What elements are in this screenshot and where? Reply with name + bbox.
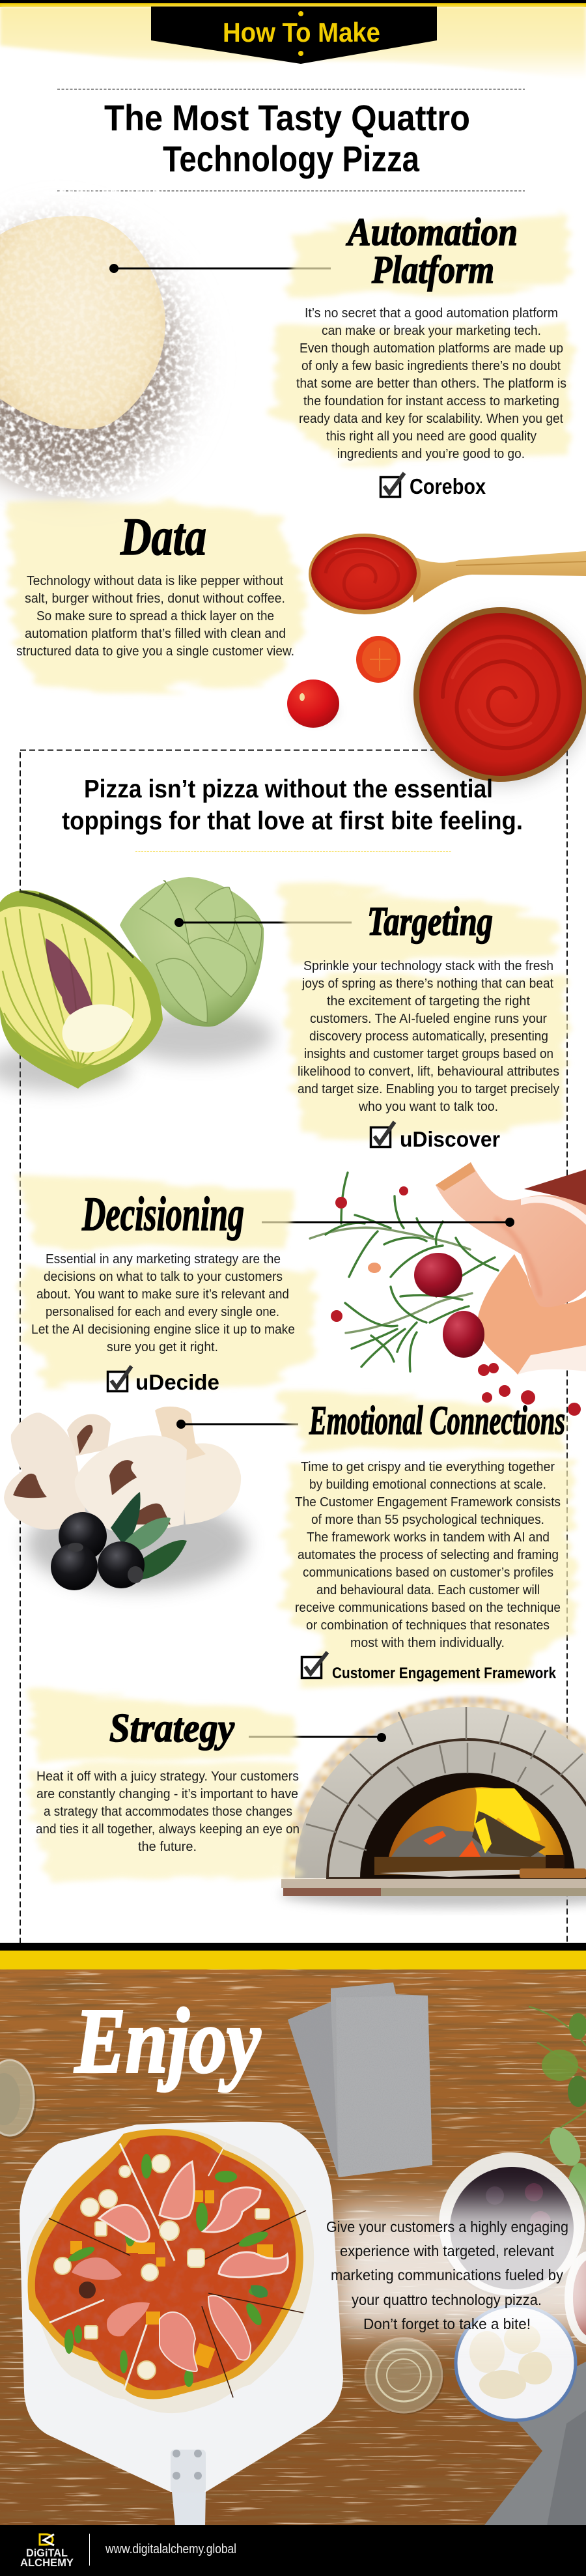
pointer line: automation platform — [109, 264, 331, 273]
body text: joys of spring as there’s nothing that can beat — [301, 977, 553, 991]
subheading: toppings statement: toppings for that love at first bite feeling. — [62, 807, 523, 835]
sliced whites — [54, 2154, 270, 2379]
product tag: Corebox — [380, 473, 486, 498]
crust — [27, 2129, 314, 2413]
body text: automation platform that’s filled with clean and — [25, 627, 286, 641]
icon: cherry tomato half — [356, 636, 400, 683]
body text: decisions on what to talk to your customers — [44, 1270, 283, 1284]
counter — [281, 1879, 586, 1888]
cranberries — [414, 1253, 462, 1297]
body text: most with them individually. — [350, 1636, 505, 1650]
body text: this right all you need are good quality — [326, 429, 537, 444]
body text: the excitement of targeting the right — [327, 994, 530, 1009]
body text: ready data and key for scalability. When you get — [299, 412, 563, 426]
body text: So make sure to spread a thick layer on the — [36, 609, 274, 623]
sauce — [28, 2129, 303, 2399]
body text: automates the process of selecting and framing — [298, 1548, 559, 1562]
body text: Sprinkle your technology stack with the fresh — [303, 959, 553, 973]
pizza peel — [20, 2122, 343, 2526]
body text: a strategy that accommodates those changes — [44, 1805, 292, 1819]
product tag: uDecide: uDecide — [135, 1370, 219, 1394]
banner: How To Make: How To Make — [223, 17, 380, 48]
body text — [36, 1769, 300, 1854]
panel: decisioning — [14, 1175, 313, 1394]
heading: Automation Platform: Automation — [345, 210, 518, 253]
body text: communications based on customer’s profiles — [303, 1566, 553, 1580]
closing text — [326, 2218, 568, 2332]
herbs — [529, 2007, 586, 2215]
body text: Essential in any marketing strategy are the — [46, 1252, 281, 1267]
divider — [89, 2534, 90, 2566]
website: www.digitalalchemy.global — [105, 2542, 236, 2556]
pointer line: emotional connections — [176, 1420, 298, 1429]
body text: receive communications based on the technique — [295, 1601, 561, 1615]
bowl of cherries — [439, 2153, 586, 2298]
body text — [298, 959, 559, 1114]
body text: structured data to give you a single customer view. — [16, 644, 294, 659]
image: stone pizza oven — [280, 1696, 586, 1908]
body text: Time to get crispy and tie everything together — [301, 1460, 555, 1474]
heading: Automation Platform: Platform — [371, 248, 494, 291]
body text: about. You want to make sure it’s relevant and — [36, 1287, 289, 1302]
body text — [295, 1460, 561, 1650]
glass on table — [365, 2338, 444, 2414]
body text: personalised for each and every single one. — [46, 1305, 279, 1319]
body text: customers. The AI-fueled engine runs your — [310, 1012, 547, 1026]
body text: Heat it off with a juicy strategy. Your customers — [36, 1769, 299, 1784]
product tag: uDiscover — [371, 1122, 500, 1151]
body text: The Customer Engagement Framework consists — [295, 1495, 561, 1510]
body text: of more than 55 psychological techniques. — [311, 1513, 544, 1527]
body text: Even though automation platforms are made up — [300, 341, 563, 356]
body text: that some are better than others. The platform is — [296, 377, 566, 391]
white glow behind text — [332, 2205, 586, 2332]
bowl at right edge — [565, 2251, 586, 2345]
title block — [57, 89, 525, 191]
image: dough on floured wood — [0, 173, 247, 498]
bowl of rolled starters — [456, 2306, 576, 2420]
top stripes — [0, 0, 586, 7]
body text: insights and customer target groups based on — [304, 1047, 553, 1061]
subheading: toppings statement: Pizza isn’t pizza without the essential — [84, 775, 493, 803]
body text: or combination of techniques that resonates — [306, 1618, 550, 1633]
image: rosemary, cranberries and ham — [310, 1162, 586, 1416]
product tag: Customer Engagement Framework — [302, 1652, 557, 1682]
body text: of only a few basic ingredients there’s no doubt — [301, 359, 561, 373]
prosciutto slices — [72, 2162, 288, 2371]
body text: ingredients and you’re good to go. — [337, 447, 525, 461]
napkin bottom right — [484, 2362, 586, 2526]
body text: discovery process automatically, presenting — [309, 1029, 548, 1044]
title block: The Most Tasty Quattro — [104, 97, 470, 138]
body text — [31, 1252, 295, 1354]
banner: How To Make — [151, 7, 437, 64]
title block: Technology Pizza — [163, 138, 420, 179]
image: mushrooms and olives — [4, 1407, 247, 1590]
body text: likelihood to convert, lift, behavioural attributes — [298, 1065, 559, 1079]
pointer line: targeting — [174, 918, 352, 927]
fire — [389, 1787, 564, 1857]
body text: sure you get it right. — [107, 1340, 218, 1354]
body text — [296, 306, 566, 461]
product tag: Customer Engagement Framework: Customer Engagement Framework — [332, 1665, 557, 1682]
panel: emotional connections — [277, 1394, 573, 1687]
pointer line: strategy — [249, 1733, 386, 1742]
stripes above enjoy panel — [0, 1943, 586, 1969]
body text: are constantly changing - it’s important to have — [36, 1787, 298, 1801]
top yellow brush wash — [0, 7, 586, 79]
product tag: Corebox: Corebox — [410, 474, 486, 498]
body text: who you want to talk too. — [358, 1100, 498, 1114]
body text: the future. — [138, 1840, 197, 1854]
slice cuts — [49, 2142, 227, 2391]
body text — [16, 574, 294, 659]
body text: the foundation for instant access to marketing — [303, 394, 559, 408]
prosciutto — [524, 1169, 586, 1205]
heading: Automation Platform — [345, 210, 518, 291]
image: wooden spoon of sauce — [309, 534, 586, 614]
body text: by building emotional connections at scale. — [309, 1478, 546, 1492]
logo: Digital Alchemy: ALCHEMY — [20, 2556, 74, 2569]
product tag: uDiscover: uDiscover — [400, 1127, 500, 1151]
body text: and target size. Enabling you to target precisely — [298, 1082, 559, 1096]
body text: Technology without data is like pepper without — [27, 574, 283, 588]
panel: targeting — [280, 887, 565, 1151]
icon: cherry tomato whole — [287, 680, 339, 728]
product tag: uDecide — [108, 1366, 219, 1394]
logo: Digital Alchemy: DiGiTAL — [26, 2547, 68, 2559]
closing text: experience with targeted, relevant — [340, 2242, 555, 2259]
closing text: Give your customers a highly engaging — [326, 2218, 568, 2235]
enjoy heading: Enjoy — [74, 1989, 261, 2092]
logo: Digital Alchemy — [20, 2534, 74, 2569]
body text: The framework works in tandem with AI and — [307, 1530, 550, 1545]
dashed toppings frame — [20, 751, 567, 1949]
orange peppers — [70, 2190, 273, 2368]
closing text: Don’t forget to take a bite! — [363, 2315, 531, 2332]
pointer dot: decisioning — [505, 1218, 514, 1227]
body text: can make or break your marketing tech. — [322, 324, 541, 338]
body text: It’s no secret that a good automation platform — [305, 306, 558, 321]
pizza peel — [380, 1870, 520, 1877]
body text: Let the AI decisioning engine slice it up to make — [31, 1323, 295, 1337]
body text: and ties it all together, always keeping an eye on — [36, 1822, 300, 1837]
pointer line: decisioning — [262, 1221, 510, 1224]
napkin top — [288, 1982, 434, 2178]
wood texture — [0, 1969, 586, 2526]
panel: enjoy wooden table — [0, 1969, 586, 2526]
green peppers — [64, 2154, 270, 2387]
pizza — [26, 2124, 314, 2413]
closing text: marketing communications fueled by — [331, 2267, 563, 2283]
lettuce — [251, 2285, 268, 2298]
body text: salt, burger without fries, donut without coffee. — [25, 592, 285, 606]
heading: Data: Data — [120, 507, 206, 566]
heading: Strategy: Strategy — [109, 1706, 234, 1751]
image: artichokes — [0, 877, 273, 1091]
rosemary — [310, 1173, 498, 1371]
icon: water glass left — [0, 2060, 36, 2139]
footer — [0, 2525, 586, 2576]
subheading: toppings statement — [62, 775, 523, 852]
closing text: your quattro technology pizza. — [352, 2291, 542, 2308]
heading: Decisioning: Decisioning — [81, 1188, 244, 1241]
image: bowl of tomato sauce — [413, 607, 586, 785]
body text: and behavioural data. Each customer will — [316, 1583, 540, 1597]
panel: automation platform — [273, 210, 570, 498]
oven floor — [374, 1857, 563, 1875]
peppercorns — [331, 1186, 581, 1416]
heading: Targeting: Targeting — [367, 900, 493, 944]
panel: data — [7, 502, 305, 689]
panel: strategy — [23, 1691, 300, 1882]
